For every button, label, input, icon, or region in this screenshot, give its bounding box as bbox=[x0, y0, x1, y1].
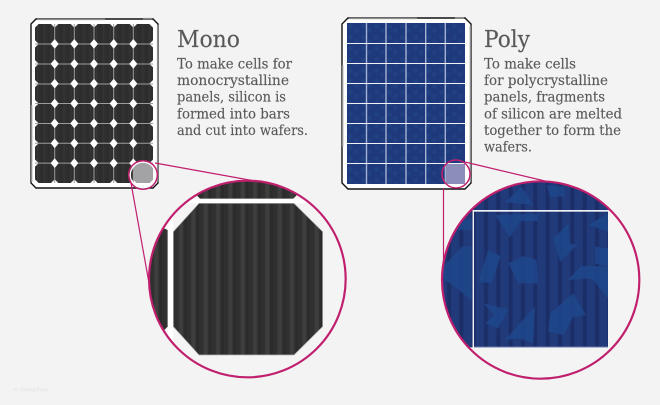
text block: poly description: of silicon are melted bbox=[484, 106, 622, 122]
text block: poly description: wafers. bbox=[484, 140, 532, 156]
text block: poly description: panels, fragments bbox=[484, 90, 605, 106]
heading: Mono: Mono bbox=[177, 27, 240, 53]
magnifier ring: poly small bbox=[442, 160, 470, 188]
magnifier: poly cell bbox=[437, 177, 650, 379]
panel: poly solar panel bbox=[342, 18, 471, 189]
text block: mono description: To make cells for bbox=[177, 56, 292, 72]
magnifier: mono cell bbox=[145, 177, 352, 377]
text block: mono description: formed into bars bbox=[177, 106, 290, 122]
text block: poly description: together to form the bbox=[484, 123, 621, 139]
text block: poly description: To make cells bbox=[484, 56, 576, 72]
text block: mono description: and cut into wafers. bbox=[177, 123, 308, 139]
callout lines: mono bbox=[131, 163, 255, 283]
magnifier ring: mono small bbox=[129, 161, 157, 189]
text block: mono description: monocrystalline bbox=[177, 73, 289, 89]
text block: mono description bbox=[177, 56, 308, 139]
panel: mono solar panel bbox=[31, 19, 158, 188]
credit: © EnergySage bbox=[14, 386, 48, 393]
text block: poly description bbox=[484, 56, 622, 156]
heading: Poly: Poly bbox=[484, 27, 530, 53]
text block: poly description: for polycrystalline bbox=[484, 73, 608, 89]
text block: mono description: panels, silicon is bbox=[177, 90, 286, 106]
callout lines: poly bbox=[444, 162, 545, 272]
